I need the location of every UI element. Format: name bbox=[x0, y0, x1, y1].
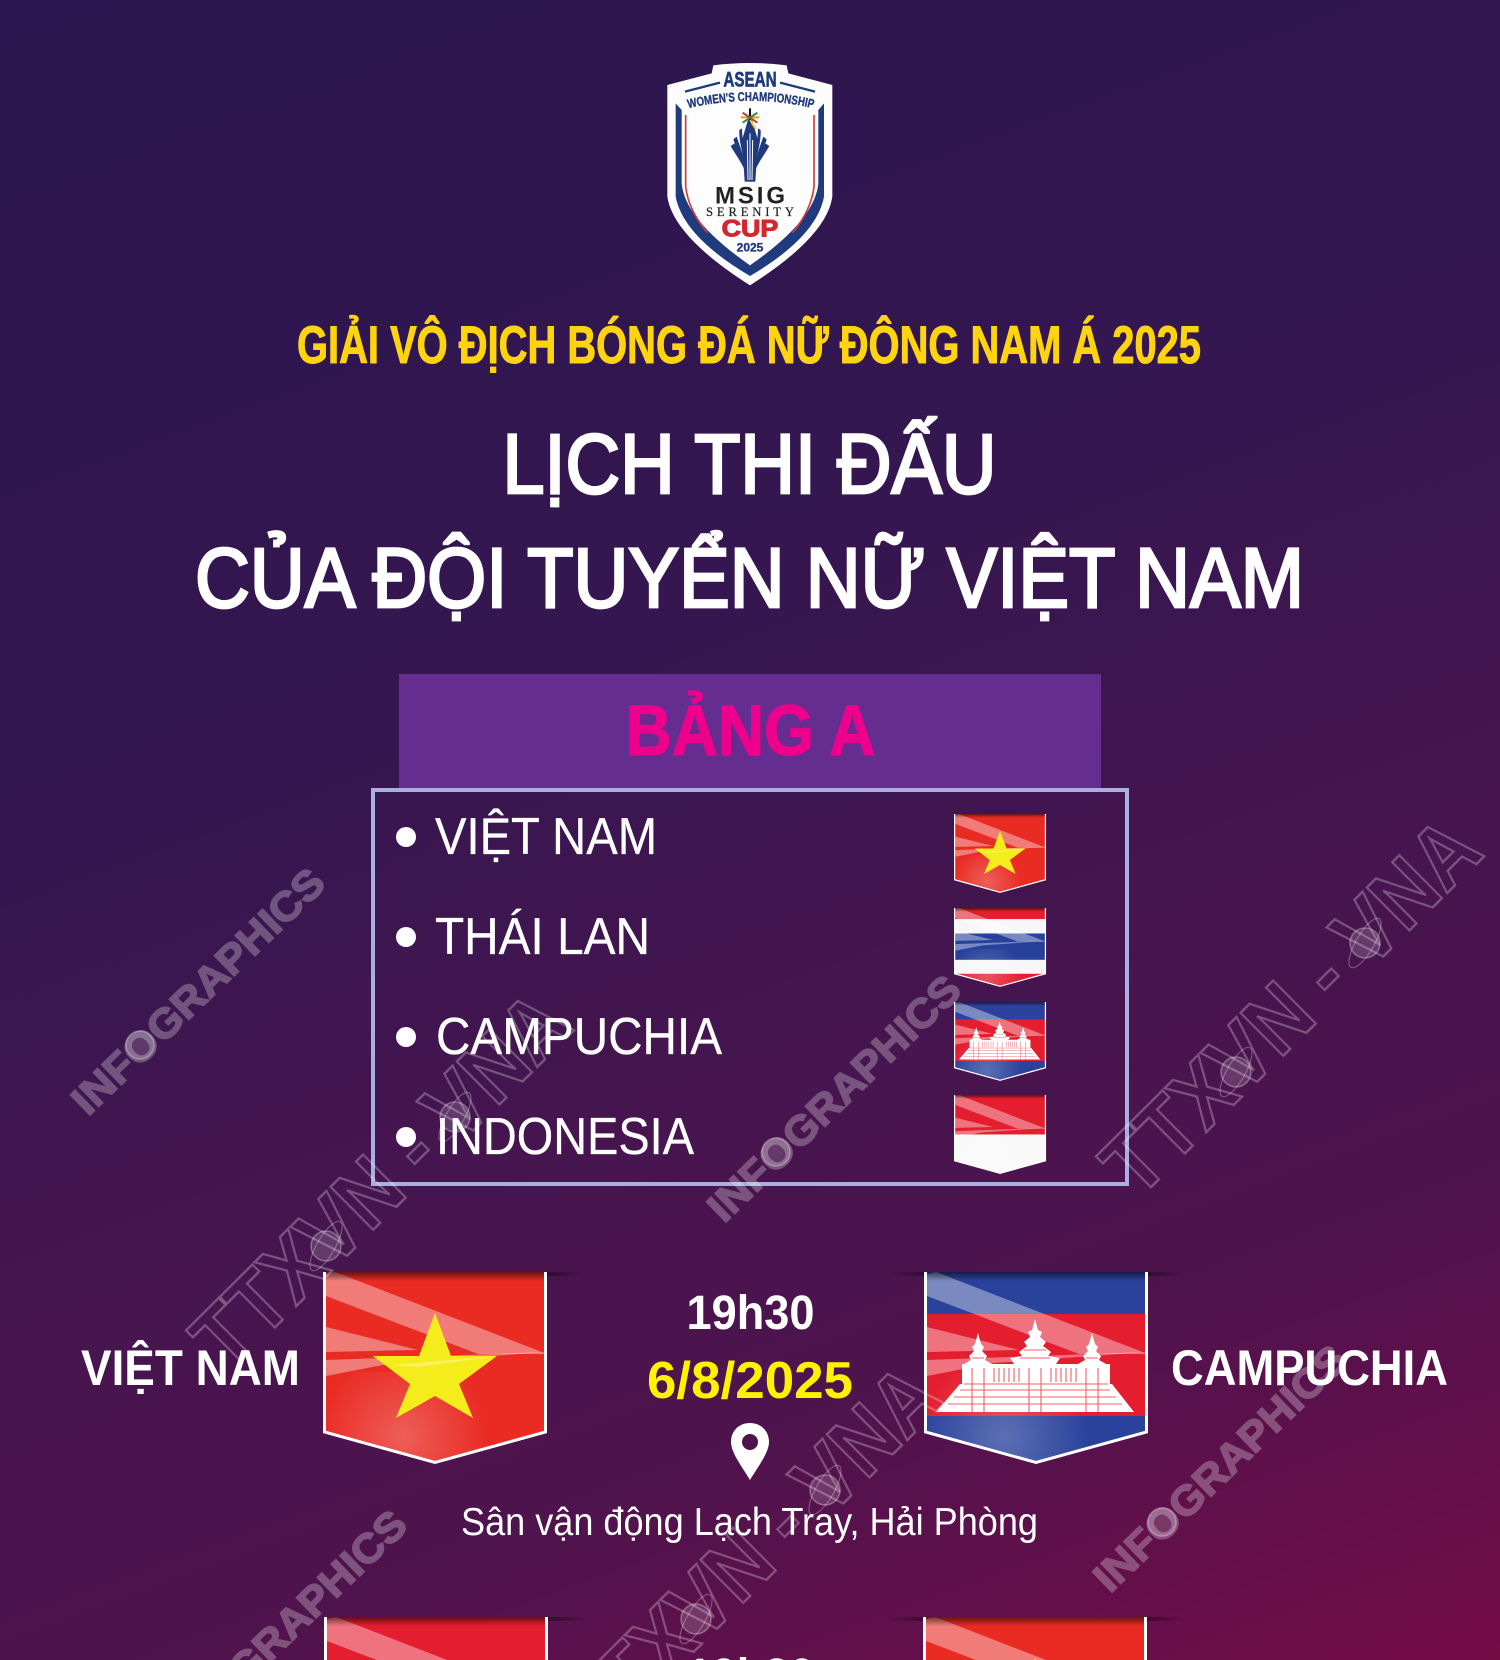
group header: BẢNG A bbox=[626, 692, 876, 771]
tournament logo: MSIG bbox=[715, 182, 785, 209]
heading: tournament name: GIẢI VÔ ĐỊCH BÓNG ĐÁ NỮ ĐÔNG NAM Á 2025 bbox=[297, 314, 1201, 375]
flag: Indonesia bbox=[324, 1617, 584, 1660]
venue: Sân vận động Lạch Tray, Hải Phòng bbox=[461, 1501, 1038, 1544]
icon: map pin bbox=[731, 1423, 769, 1480]
flag: Việt Nam bbox=[323, 1272, 583, 1464]
kick-off time: 19h30 bbox=[686, 1287, 814, 1340]
match 2 (cropped) bbox=[324, 1617, 1183, 1660]
team row: Indonesia bbox=[396, 1095, 1046, 1174]
watermark: INFOGRAPHICS centre: INFOGRAPHICS bbox=[698, 966, 970, 1230]
team row: Indonesia: INDONESIA bbox=[436, 1108, 694, 1166]
team row: Việt Nam bbox=[396, 808, 1046, 893]
team: Campuchia: CAMPUCHIA bbox=[1171, 1340, 1448, 1396]
team row: Thái Lan bbox=[396, 908, 1046, 987]
watermark: TTXVN left: TTXVN - VNA bbox=[172, 972, 589, 1387]
match date: 6/8/2025 bbox=[647, 1352, 853, 1410]
flag: Campuchia bbox=[888, 1272, 1184, 1464]
tournament logo: SERENITY bbox=[706, 205, 794, 219]
watermark: INFOGRAPHICS right: INFOGRAPHICS bbox=[1084, 1336, 1356, 1600]
tournament logo: 2025 bbox=[737, 241, 764, 255]
flag: Việt Nam bbox=[887, 1617, 1183, 1660]
tournament logo: WOMEN'S CHAMPIONSHIP bbox=[686, 92, 814, 108]
panel: group A bbox=[373, 674, 1127, 1184]
team row: Việt Nam: VIỆT NAM bbox=[435, 808, 657, 866]
tournament logo: ASEAN bbox=[723, 68, 777, 92]
main title: CỦA ĐỘI TUYỂN NỮ VIỆT NAM bbox=[195, 531, 1304, 625]
team row: Campuchia: CAMPUCHIA bbox=[436, 1008, 722, 1066]
team: Việt Nam: VIỆT NAM bbox=[81, 1340, 300, 1396]
main title: LỊCH THI ĐẤU bbox=[502, 417, 996, 511]
tournament logo: CUP bbox=[722, 216, 778, 243]
group box outline bbox=[373, 790, 1127, 1184]
team row: Thái Lan: THÁI LAN bbox=[435, 908, 650, 966]
team row: Campuchia bbox=[396, 1002, 1046, 1081]
main title bbox=[195, 417, 1304, 625]
watermark: INFOGRAPHICS left: INFOGRAPHICS bbox=[62, 859, 334, 1123]
tournament logo bbox=[667, 63, 832, 286]
group header bbox=[399, 674, 1101, 789]
match 1 bbox=[81, 1272, 1448, 1544]
